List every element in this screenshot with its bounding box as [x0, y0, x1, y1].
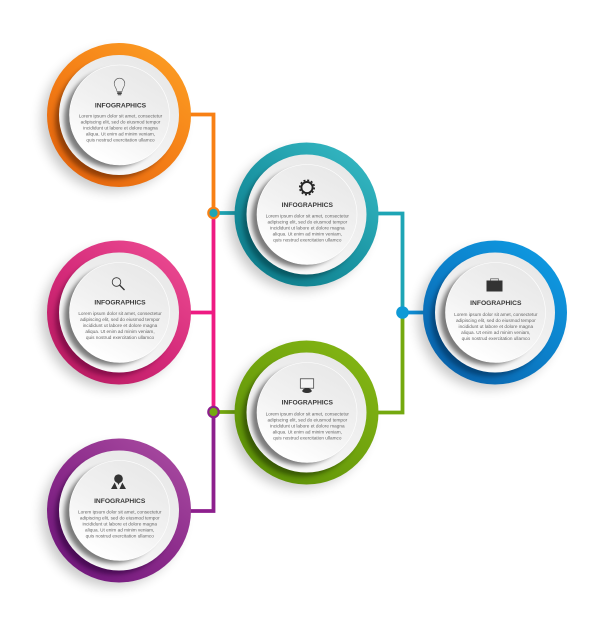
text block: quis nostrud exercitation ullamco — [86, 137, 155, 142]
text block: adipiscing elit, sed do eiusmod tempor — [80, 515, 160, 520]
text block: adipiscing elit, sed do eiusmod tempor — [456, 318, 536, 323]
heading: INFOGRAPHICS — [470, 300, 522, 307]
panel: orange circle — [42, 43, 191, 191]
text block: incididunt ut labore et dolore magna — [270, 226, 345, 231]
text block: Lorem ipsum dolor sit amet, consectetur — [454, 312, 538, 317]
text block: aliqua. Ut enim ad minim veniam, — [85, 329, 155, 334]
text block: quis nostrud exercitation ullamco — [462, 336, 530, 341]
text block — [454, 312, 538, 341]
text block: quis nostrud exercitation ullamco — [86, 533, 154, 538]
text block: adipiscing elit, sed do eiusmod tempor — [267, 220, 348, 225]
text block: aliqua. Ut enim ad minim veniam, — [273, 429, 342, 434]
panel: green circle — [230, 340, 378, 488]
connector: pink line — [190, 213, 214, 412]
heading: INFOGRAPHICS — [95, 102, 147, 109]
text block — [79, 113, 163, 142]
text block: aliqua. Ut enim ad minim veniam, — [86, 131, 155, 136]
text block: adipiscing elit, sed do eiusmod tempor — [81, 119, 161, 124]
text block — [78, 509, 162, 538]
icon: gear — [300, 180, 314, 195]
text block: quis nostrud exercitation ullamco — [86, 335, 155, 340]
icon: magnifier — [112, 278, 124, 290]
heading: INFOGRAPHICS — [282, 202, 333, 209]
icon: briefcase — [486, 279, 502, 292]
text block: incididunt ut labore et dolore magna — [83, 125, 158, 130]
connector: blue line — [402, 311, 424, 314]
text block: adipiscing elit, sed do eiusmod tempor — [267, 417, 348, 422]
heading: INFOGRAPHICS — [94, 498, 146, 505]
text block: Lorem ipsum dolor sit amet, consectetur — [78, 311, 162, 316]
text block: incididunt ut labore et dolore magna — [82, 521, 157, 526]
node: blue — [396, 306, 409, 319]
icon: person — [111, 474, 126, 489]
text block — [266, 411, 349, 440]
connector: green line — [214, 312, 402, 412]
text block: incididunt ut labore et dolore magna — [270, 423, 345, 428]
text block — [266, 214, 349, 243]
text block: aliqua. Ut enim ad minim veniam, — [85, 527, 154, 532]
text block: aliqua. Ut enim ad minim veniam, — [461, 330, 530, 335]
text block: incididunt ut labore et dolore magna — [83, 323, 158, 328]
text block: Lorem ipsum dolor sit amet, consectetur — [79, 113, 163, 118]
text block: quis nostrud exercitation ullamco — [273, 435, 342, 440]
text block: incididunt ut labore et dolore magna — [459, 324, 533, 329]
connector: purple line — [190, 412, 214, 511]
text block — [78, 311, 162, 340]
connector: orange line — [190, 114, 214, 213]
icon: light bulb — [114, 78, 125, 95]
heading: INFOGRAPHICS — [282, 400, 333, 407]
connector: teal line — [214, 213, 402, 312]
heading: INFOGRAPHICS — [94, 300, 146, 307]
text block: quis nostrud exercitation ullamco — [273, 238, 342, 243]
panel: pink circle — [42, 240, 191, 388]
icon: monitor — [300, 379, 314, 393]
panel: teal circle — [230, 142, 378, 290]
panel: blue circle — [418, 240, 567, 388]
panel: purple circle — [42, 438, 191, 586]
text block: Lorem ipsum dolor sit amet, consectetur — [266, 214, 349, 219]
node: green with purple ring — [208, 407, 219, 417]
text block: Lorem ipsum dolor sit amet, consectetur — [266, 411, 349, 416]
text block: aliqua. Ut enim ad minim veniam, — [273, 232, 342, 237]
text block: Lorem ipsum dolor sit amet, consectetur — [78, 509, 162, 514]
node: teal with orange ring — [208, 208, 219, 218]
text block: adipiscing elit, sed do eiusmod tempor — [80, 317, 160, 322]
